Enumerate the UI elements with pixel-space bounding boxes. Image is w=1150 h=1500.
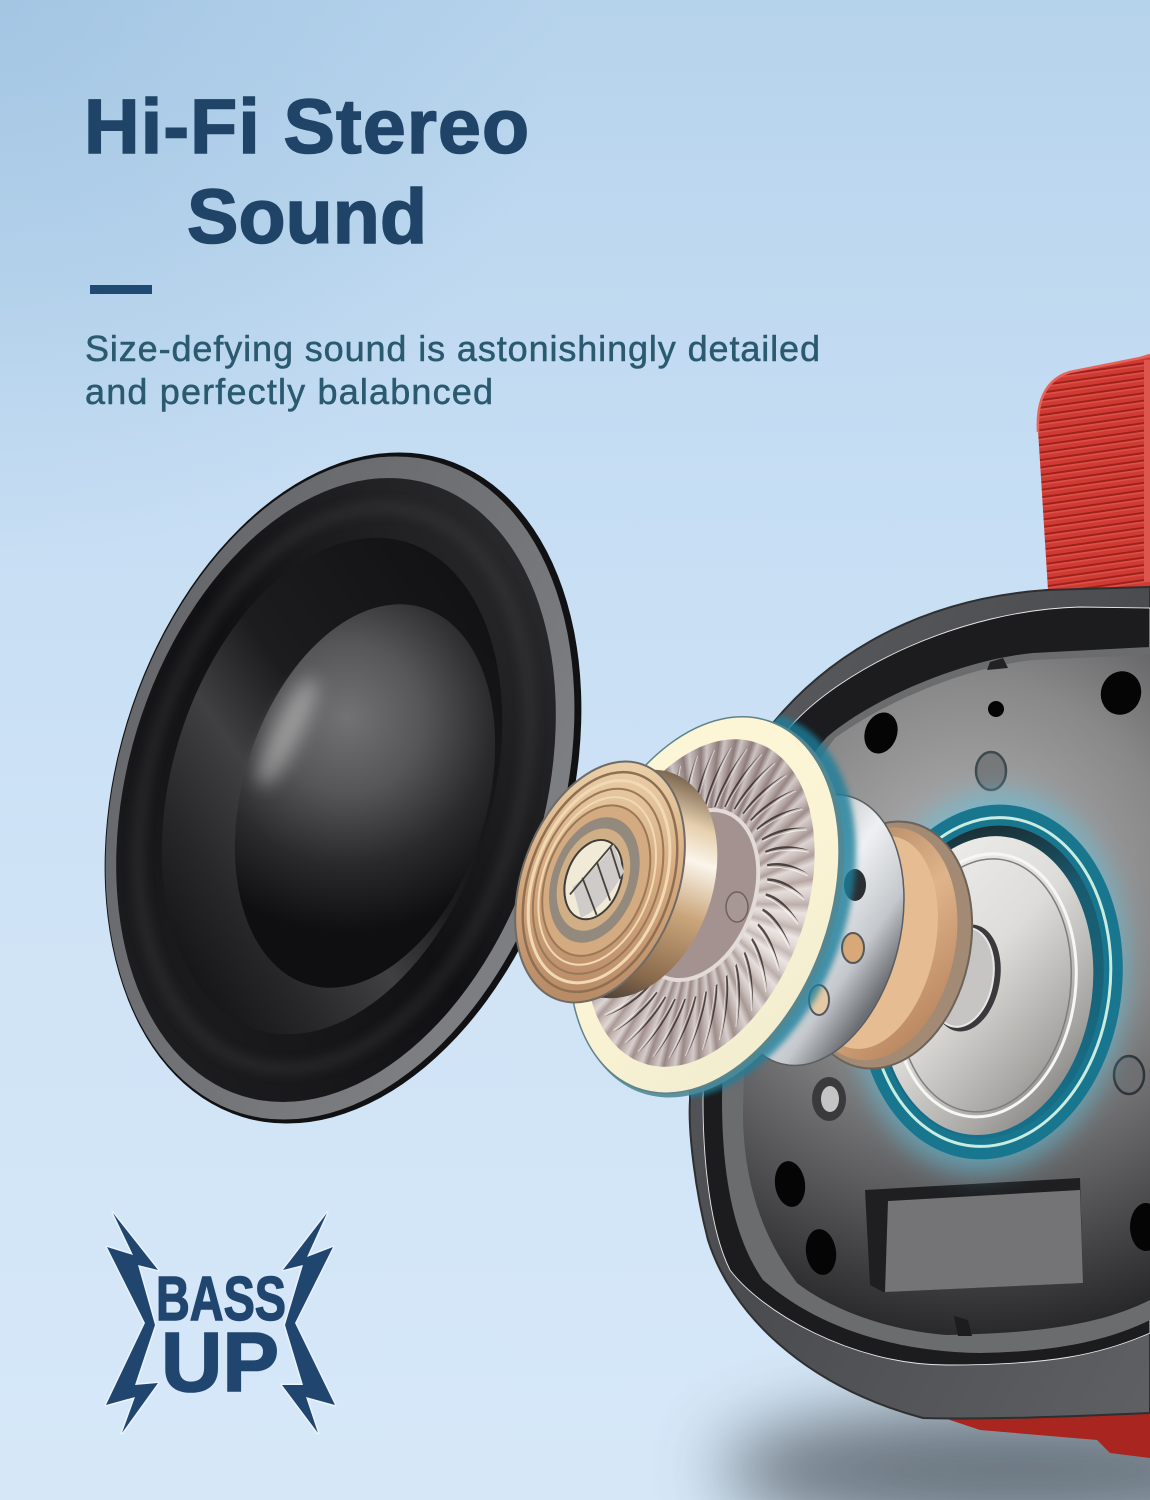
woofer outer black edge: [26, 393, 660, 1183]
dome highlight: [248, 672, 326, 792]
copper ring: [776, 805, 994, 1085]
large woofer: [26, 393, 660, 1183]
woofer silver rim: [28, 398, 652, 1178]
subtitle text: Size-defying sound is astonishingly detailed: [85, 328, 820, 369]
red carrying strap: [1038, 355, 1150, 590]
plate ring details: [812, 752, 1144, 1121]
BASS text: BASS: [156, 1265, 286, 1334]
center mesh: [554, 832, 633, 927]
title: Sound: [187, 174, 427, 260]
blade ticks: [551, 717, 849, 1089]
silver ring with holes: [699, 776, 931, 1084]
surround ridge highlight: [73, 458, 595, 1118]
right lightning bolt: [282, 1213, 335, 1433]
metal diaphragm with radial blades: [543, 707, 857, 1099]
gold capsule: [484, 738, 748, 1026]
outer dark rim: [690, 587, 1150, 1418]
inner back plate: [743, 655, 1150, 1335]
bass driver with teal ring: [830, 774, 1150, 1190]
woofer cone: [104, 495, 560, 1077]
red base of housing: [905, 1400, 1150, 1458]
driver center hub: [922, 919, 1009, 1037]
teal glass glow: [690, 713, 860, 1100]
glass diaphragm cream ring: [519, 678, 894, 1136]
woofer rubber surround: [44, 423, 628, 1157]
woofer dome: [191, 572, 539, 1020]
title: Hi-Fi Stereo: [84, 84, 529, 170]
title divider bar: [90, 285, 152, 294]
inner gray ring: [722, 647, 1150, 1353]
title: [84, 84, 529, 260]
diaphragm center cup: [611, 792, 781, 998]
battery recess: [865, 1178, 1083, 1292]
UP text: UP: [161, 1315, 279, 1409]
Bass Up badge: [106, 1213, 335, 1433]
bottom notch: [954, 1316, 972, 1336]
subtitle text: and perfectly balabnced: [85, 371, 493, 412]
mounting holes: [772, 665, 1150, 1277]
gold front face: [484, 738, 716, 1026]
black channel with silver line: [703, 607, 1150, 1365]
top notch: [987, 658, 1008, 670]
left lightning bolt: [106, 1213, 158, 1433]
speaker housing: [690, 587, 1150, 1458]
gray inner ring: [533, 805, 656, 955]
speaker floor shadow: [720, 1405, 1150, 1500]
subtitle text: [85, 328, 820, 412]
